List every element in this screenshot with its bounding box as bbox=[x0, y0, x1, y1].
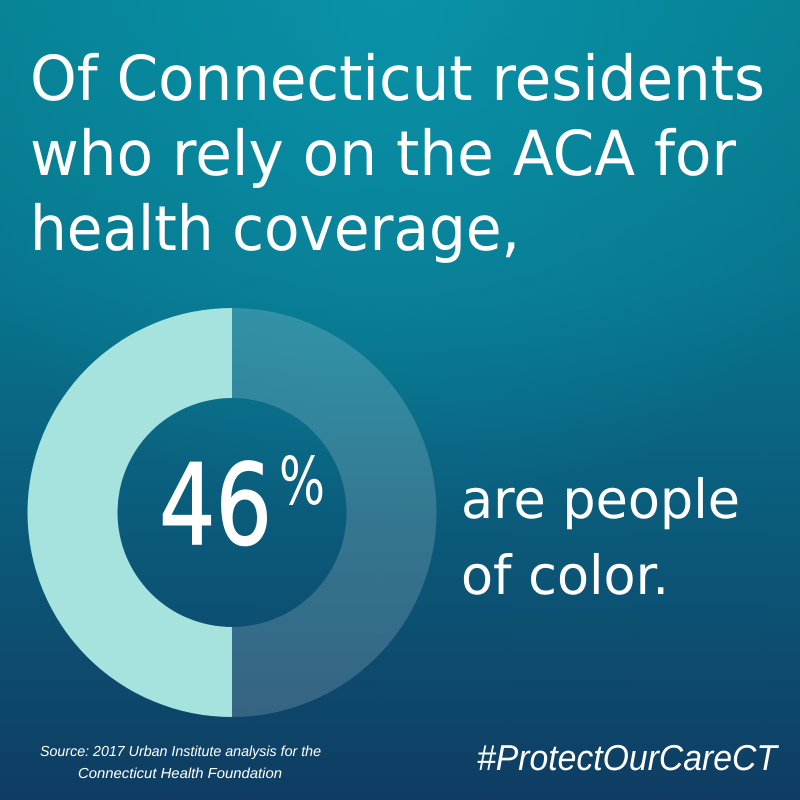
source note: Connecticut Health Foundation bbox=[78, 766, 282, 782]
source note bbox=[40, 744, 321, 782]
title: Of Connecticut residents bbox=[30, 42, 765, 115]
donut chart bbox=[28, 308, 437, 717]
dark segment bbox=[232, 308, 436, 717]
light segment bbox=[28, 308, 232, 717]
title: who rely on the ACA for bbox=[30, 117, 736, 190]
caption: are people bbox=[461, 468, 740, 531]
hashtag: #ProtectOurCareCT bbox=[477, 737, 780, 778]
caption: of color. bbox=[461, 544, 669, 607]
donut value: 46 bbox=[159, 441, 272, 571]
source note: Source: 2017 Urban Institute analysis for the bbox=[40, 744, 321, 760]
title bbox=[30, 42, 765, 265]
title: health coverage, bbox=[30, 192, 520, 265]
caption bbox=[461, 468, 740, 607]
donut value: % bbox=[279, 443, 325, 520]
